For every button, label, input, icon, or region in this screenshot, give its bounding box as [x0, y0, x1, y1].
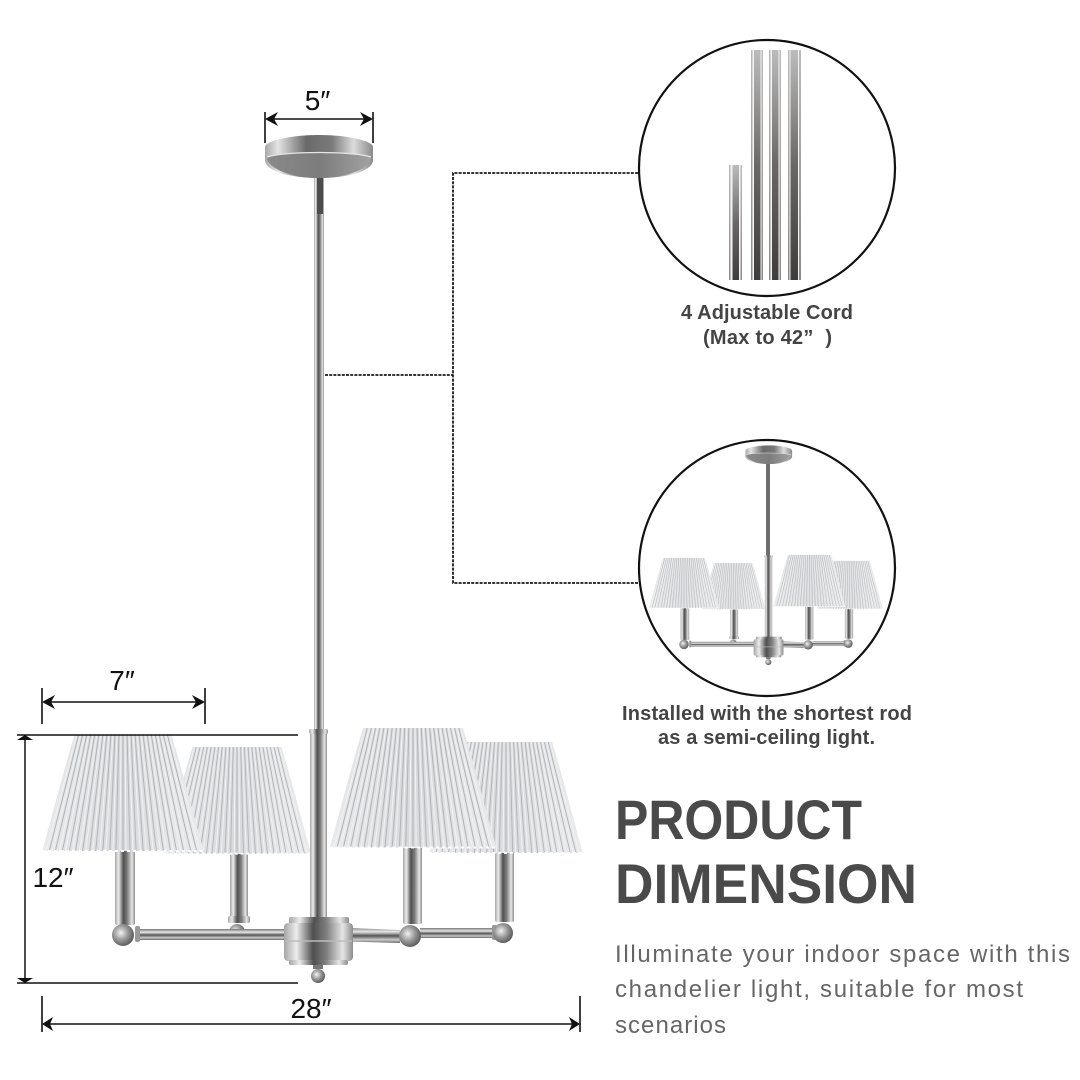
ceiling canopy [265, 135, 373, 178]
title: PRODUCT [615, 788, 862, 851]
description text: chandelier light, suitable for most [615, 976, 1023, 1003]
shades, arms and hub [42, 728, 583, 983]
detail circle: adjustable cords [639, 40, 895, 296]
detail circle: semi-ceiling installation [639, 440, 895, 696]
dimension: canopy width [265, 85, 373, 143]
description text: scenarios [615, 1012, 726, 1039]
label: 7 inches: 7″ [109, 665, 135, 696]
title: DIMENSION [615, 852, 917, 915]
description text: Illuminate your indoor space with this [615, 941, 1070, 968]
mini canopy [745, 445, 792, 464]
icon: long cord 1 [751, 50, 763, 280]
dashed connector lines [325, 173, 638, 583]
caption: shortest rod: as a semi-ceiling light. [658, 727, 875, 749]
caption: adjustable cord: 4 Adjustable Cord [681, 302, 853, 324]
main chandelier [42, 135, 583, 983]
icon: long cord 2 [769, 50, 781, 280]
mini rod [766, 462, 770, 556]
label: 28 inches: 28″ [290, 993, 332, 1024]
caption: adjustable cord: (Max to 42” ) [703, 327, 832, 349]
dimension: overall width [42, 993, 580, 1032]
dimension: shade width [42, 665, 205, 724]
icon: long cord 3 [788, 50, 801, 280]
label: 5 inches: 5″ [305, 85, 330, 116]
label: 12 inches: 12″ [32, 862, 74, 893]
icon: short cord [729, 165, 742, 280]
dimension: body height [17, 735, 298, 983]
hanging rod [314, 160, 324, 730]
mini chandelier [649, 555, 883, 665]
caption: shortest rod: Installed with the shortest rod [622, 703, 912, 725]
